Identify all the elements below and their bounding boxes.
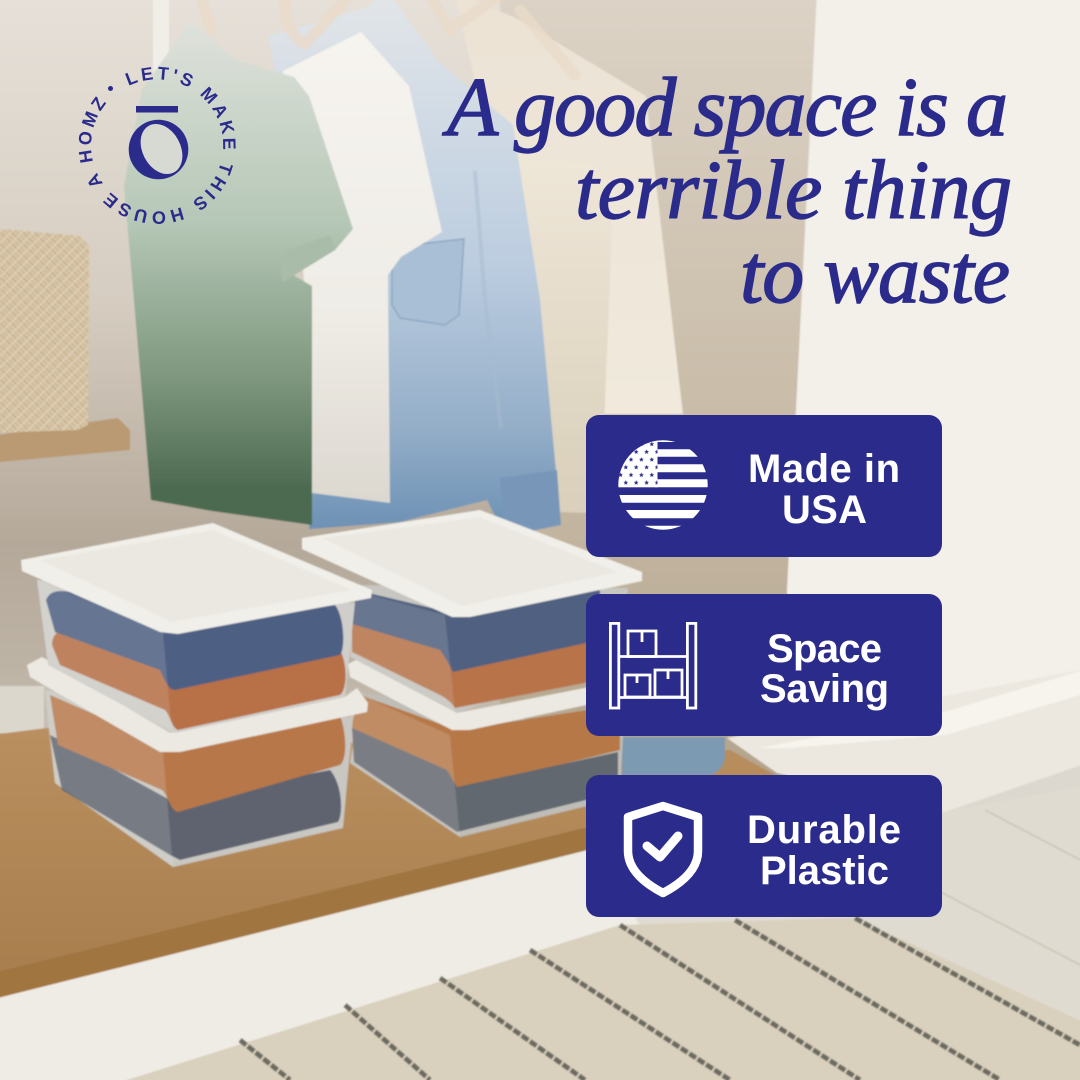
denim pocket — [392, 239, 464, 325]
headline: to waste — [740, 228, 1010, 321]
label: durable plastic: Plastic — [760, 849, 889, 893]
woven basket — [0, 228, 89, 433]
closet rail post — [153, 0, 169, 80]
badge: made in USA — [586, 415, 942, 557]
storage box: front left bottom — [27, 657, 368, 867]
closet recess — [500, 0, 817, 780]
lid rim — [302, 510, 642, 617]
plastic side overlay — [350, 690, 460, 837]
orange towel — [350, 695, 620, 790]
left baseboard — [0, 686, 44, 733]
hangers — [200, 0, 575, 75]
storage box: back right top — [302, 510, 642, 713]
headline: A good space is a — [442, 61, 1008, 154]
icon: american flag — [617, 440, 710, 534]
box body — [45, 690, 353, 867]
denim shirt — [268, 0, 561, 536]
floor — [560, 785, 1080, 1080]
blue towel — [46, 591, 343, 690]
baseboard lip — [760, 668, 1080, 748]
lid rim — [21, 523, 372, 634]
logo badge — [78, 66, 236, 224]
label: durable plastic — [747, 808, 901, 893]
wooden platform front edge — [0, 775, 775, 1000]
badge: space saving — [586, 594, 942, 736]
left wall — [0, 0, 610, 760]
white shirt — [283, 32, 442, 503]
box body — [350, 585, 628, 713]
storage box: back right bottom — [348, 658, 623, 837]
headline: terrible thing — [575, 144, 1012, 237]
folded jeans — [622, 737, 725, 775]
label: made in USA: USA — [782, 488, 867, 532]
label: space saving: Saving — [760, 667, 889, 711]
label: made in USA: Made in — [748, 447, 900, 491]
icon: shield with check — [628, 806, 698, 893]
white riser — [0, 850, 640, 1080]
green sleeve opening — [280, 235, 335, 282]
orange towel — [352, 620, 600, 708]
separator dot — [108, 86, 113, 91]
wall shelf — [0, 418, 130, 463]
right wall — [787, 0, 1080, 742]
badge: durable plastic — [586, 775, 942, 917]
green t-shirt — [124, 21, 353, 525]
label: space saving — [760, 627, 889, 711]
striped rug — [95, 918, 1080, 1080]
logo letter o — [129, 117, 191, 181]
cream jacket — [453, 0, 683, 414]
floor tile seams — [860, 810, 1080, 970]
grey towel — [352, 728, 618, 832]
label: durable plastic: Durable — [747, 808, 901, 852]
plastic side overlay — [42, 680, 173, 867]
headline — [442, 61, 1012, 321]
denim cuff — [500, 470, 561, 536]
baseboard — [727, 668, 1080, 812]
cream sweater — [500, 140, 612, 513]
icon: shelf with boxes — [610, 623, 696, 708]
box body — [350, 693, 623, 837]
plastic side overlay — [350, 590, 455, 712]
label: made in USA — [748, 447, 900, 532]
denim placket seam — [475, 171, 501, 428]
lid top — [322, 517, 618, 606]
lid top — [40, 530, 352, 622]
circular tagline: LET'S MAKE THIS HOUSE A HOMZ — [78, 66, 236, 224]
storage box: front left top — [21, 523, 372, 733]
grey towel — [50, 735, 341, 860]
wooden platform top — [0, 728, 775, 973]
orange towel — [52, 630, 346, 730]
logo macron bar — [136, 106, 178, 112]
blue towel — [352, 590, 600, 672]
lid — [27, 657, 368, 752]
plastic side overlay — [37, 580, 172, 733]
orange towel — [50, 695, 345, 812]
lid — [348, 658, 600, 730]
label: space saving: Space — [767, 627, 882, 671]
box body — [37, 580, 355, 733]
